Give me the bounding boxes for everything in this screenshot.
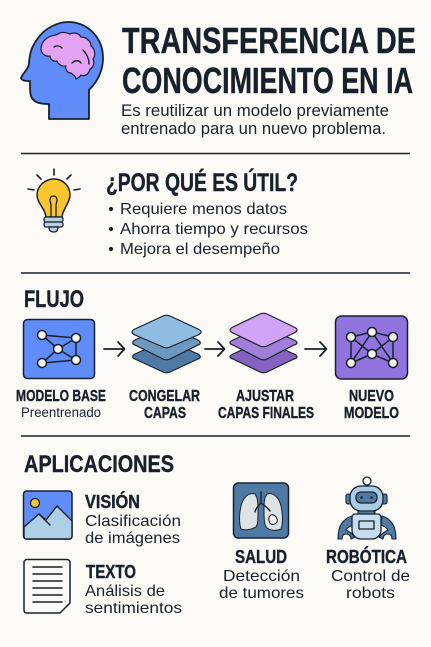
- arrow: [104, 342, 124, 356]
- item: salud: de tumores: [219, 585, 304, 602]
- step: modelo base: Preentrenado: [21, 405, 101, 420]
- subtitle: Es reutilizar un modelo previamente: [121, 101, 389, 120]
- icon: image: [24, 491, 72, 539]
- item: vision: VISIÓN: [85, 491, 140, 512]
- step: nuevo modelo: NUEVO: [349, 388, 394, 405]
- item: robotica: [326, 477, 410, 602]
- step: congelar capas: [129, 315, 201, 422]
- step: ajustar capas finales: CAPAS FINALES: [218, 405, 314, 422]
- heading: por que es util: ¿POR QUÉ ES ÚTIL?: [106, 167, 298, 197]
- subtitle: [121, 101, 389, 138]
- header section: [21, 20, 416, 138]
- step: ajustar capas finales: AJUSTAR: [236, 388, 294, 405]
- icon: robot: [338, 477, 396, 539]
- item: texto: [24, 560, 182, 617]
- subtitle: entrenado para un nuevo problema.: [121, 119, 386, 138]
- step: modelo base: MODELO BASE: [16, 388, 106, 405]
- item: vision: [24, 491, 181, 547]
- panel: por que es util: [28, 167, 308, 258]
- item: texto: TEXTO: [86, 562, 136, 582]
- arrow: [305, 342, 326, 356]
- item: salud: SALUD: [235, 547, 287, 567]
- bullet list: [109, 201, 308, 258]
- step: congelar capas: CONGELAR: [129, 388, 200, 405]
- step: modelo base: [16, 320, 106, 420]
- bullet list: Mejora el desempeño: [120, 241, 280, 258]
- arrow: [205, 342, 224, 356]
- item: vision: Clasificación: [85, 513, 181, 530]
- step: nuevo modelo: MODELO: [344, 405, 399, 422]
- icon: document: [24, 560, 70, 613]
- item: robotica: ROBÓTICA: [326, 546, 407, 567]
- icon: lungs: [234, 483, 288, 538]
- item: texto: sentimientos: [85, 600, 182, 617]
- bullet list: Requiere menos datos: [120, 201, 287, 218]
- item: texto: Análisis de: [85, 583, 165, 600]
- title: [122, 20, 416, 101]
- step: congelar capas: CAPAS: [144, 405, 186, 422]
- icon: light bulb: [28, 169, 80, 232]
- panel: flujo: [16, 286, 408, 422]
- item: salud: Detección: [223, 568, 300, 585]
- item: vision: de imágenes: [85, 530, 180, 547]
- item: robotica: robots: [346, 585, 395, 602]
- item: robotica: Control de: [331, 568, 410, 585]
- step: ajustar capas finales: [218, 313, 314, 422]
- icon: head with brain: [21, 22, 103, 119]
- panel: aplicaciones: [24, 451, 410, 617]
- heading: aplicaciones: APLICACIONES: [24, 451, 174, 478]
- step: nuevo modelo: [336, 316, 408, 422]
- bullet list: Ahorra tiempo y recursos: [120, 221, 308, 238]
- item: salud: [219, 483, 304, 602]
- heading: flujo: FLUJO: [24, 286, 84, 313]
